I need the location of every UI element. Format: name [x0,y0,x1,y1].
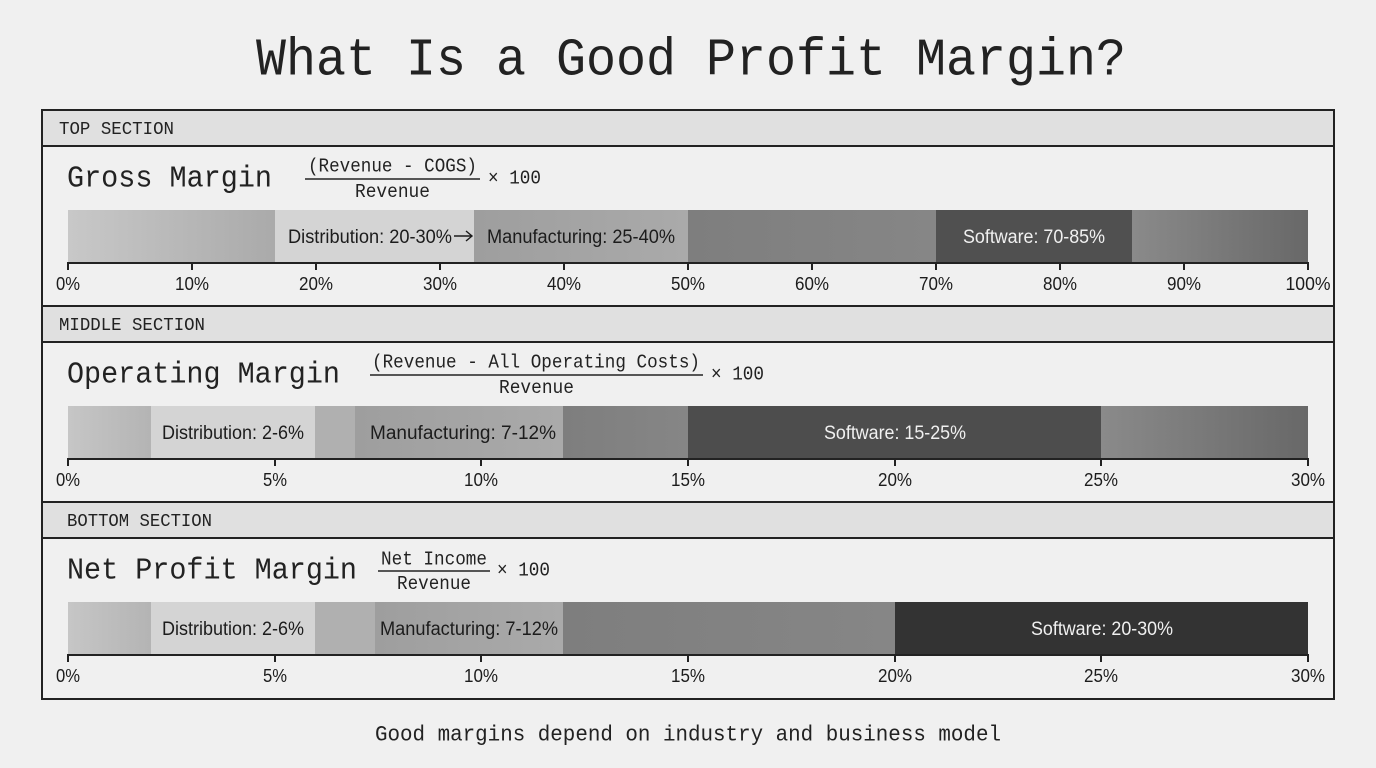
formula: net profit margin: Net Income [381,548,487,570]
bar chart: net profit margin: Distribution: 2-6% [162,619,304,640]
axis: operating margin: 0% [56,470,80,490]
panel: gross margin [56,119,1330,294]
axis: operating margin [56,459,1325,490]
bar chart: operating margin [68,406,1308,459]
bar chart: net profit margin: Software: 20-30% [1031,619,1173,640]
axis: gross margin: 70% [919,274,953,294]
formula: operating margin: Revenue [499,377,574,399]
bar chart: net profit margin: Manufacturing: 7-12% [380,619,558,640]
bar chart: net profit margin [68,602,1308,655]
axis: gross margin [56,263,1330,294]
axis: gross margin: 0% [56,274,80,294]
axis: gross margin: 30% [423,274,457,294]
bar chart: operating margin: Manufacturing: 7-12% [370,423,556,444]
heading: net profit margin: Net Profit Margin [67,554,357,588]
formula: gross margin: Revenue [355,181,430,203]
axis: gross margin: 60% [795,274,829,294]
panel: margin sections frame [42,110,1334,699]
axis: gross margin: 100% [1286,274,1330,294]
axis: operating margin: 15% [671,470,705,490]
bar chart: gross margin: Software: 70-85% [963,227,1105,248]
axis: net profit margin [56,655,1325,686]
axis: net profit margin: 10% [464,666,498,686]
formula: net profit margin: × 100 [497,560,550,582]
heading: gross margin: Gross Margin [67,162,272,196]
axis: operating margin: 10% [464,470,498,490]
section label: bottom: BOTTOM SECTION [67,511,212,532]
formula: net profit margin [378,548,550,595]
formula: gross margin [305,156,541,203]
axis: gross margin: 10% [175,274,209,294]
bar chart: operating margin: Software: 15-25% [824,423,966,444]
formula: gross margin: (Revenue - COGS) [308,156,477,178]
panel: operating margin [56,315,1325,490]
axis: gross margin: 80% [1043,274,1077,294]
formula: operating margin [370,352,764,399]
axis: net profit margin: 0% [56,666,80,686]
formula: operating margin: × 100 [711,364,764,386]
bar chart: gross margin: Distribution: 20-30% [288,227,452,248]
section label: top: TOP SECTION [59,119,174,140]
axis: operating margin: 5% [263,470,287,490]
footer note: Good margins depend on industry and business model [375,722,1001,748]
axis: gross margin: 90% [1167,274,1201,294]
axis: net profit margin: 25% [1084,666,1118,686]
axis: net profit margin: 30% [1291,666,1325,686]
formula: gross margin: × 100 [488,168,541,190]
formula: net profit margin: Revenue [397,573,471,595]
axis: operating margin: 30% [1291,470,1325,490]
heading: operating margin: Operating Margin [67,358,340,392]
title: What Is a Good Profit Margin? [256,30,1126,90]
axis: operating margin: 25% [1084,470,1118,490]
axis: gross margin: 20% [299,274,333,294]
axis: gross margin: 40% [547,274,581,294]
bar chart: gross margin [68,210,1308,263]
axis: gross margin: 50% [671,274,705,294]
section label: middle: MIDDLE SECTION [59,315,205,336]
bar chart: operating margin: Distribution: 2-6% [162,423,304,444]
bar chart: gross margin: Manufacturing: 25-40% [487,227,675,248]
formula: operating margin: (Revenue - All Operating Costs) [372,352,700,374]
axis: net profit margin: 15% [671,666,705,686]
panel: net profit margin [56,511,1325,686]
arrow: distribution to manufacturing [454,231,472,241]
axis: net profit margin: 20% [878,666,912,686]
axis: operating margin: 20% [878,470,912,490]
axis: net profit margin: 5% [263,666,287,686]
